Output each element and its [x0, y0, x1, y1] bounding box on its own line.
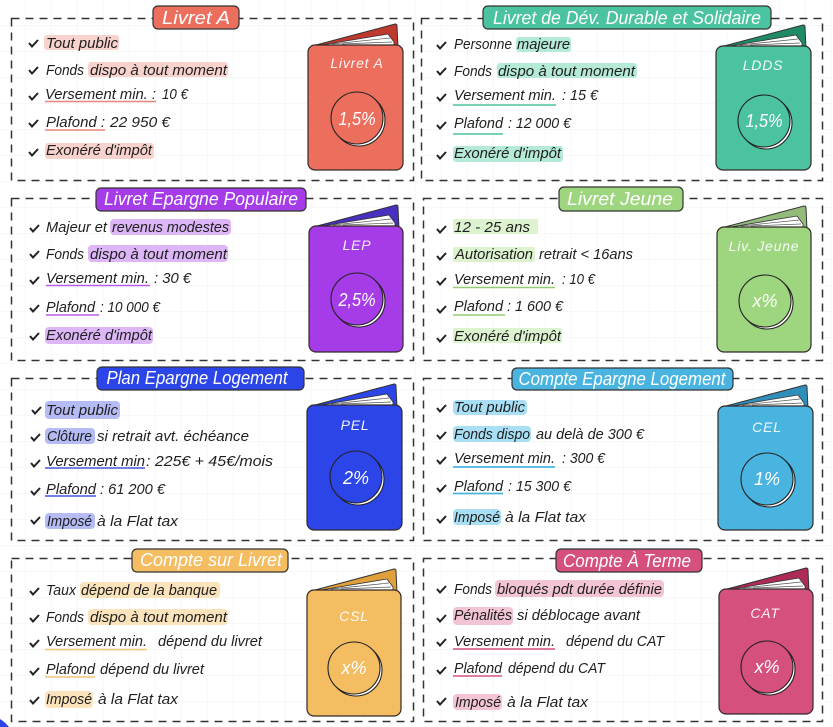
icon: CEL book: 1% [754, 469, 780, 489]
item: Tout public: Tout public [46, 35, 118, 52]
item: Plafond [30, 661, 205, 678]
item: Fonds dispo [30, 245, 228, 263]
item: Versement min: : 15 € [562, 87, 599, 104]
panel: CSL [12, 549, 414, 722]
item: Fonds bloqués: Fonds [454, 581, 492, 598]
icon: livret book: 1,5% [338, 109, 376, 129]
panel: CAT [424, 549, 822, 722]
icon: Liv. Jeune book: x% [751, 291, 778, 311]
item: Autorisation: retrait < 16ans [539, 246, 633, 263]
item: Versement min: : 30 € [154, 270, 192, 287]
item: Autorisation: Autorisation [454, 246, 533, 263]
heading: Livret Jeune [559, 187, 683, 211]
item: Fonds dispo [437, 426, 645, 443]
item: Imposé [30, 691, 179, 708]
item: Plafond [437, 478, 572, 495]
item: Versement min: : 10 € [562, 271, 596, 288]
item: Versement min: Versement min. [454, 633, 555, 650]
item: Taux: dépend de la banque [81, 582, 217, 599]
item: Versement min: : 300 € [562, 450, 606, 467]
item: Fonds dispo: dispo à tout moment [90, 609, 228, 626]
panel: LDDS [422, 6, 822, 180]
icon: CSL book: x% [340, 658, 367, 678]
item: Exonéré: Exonéré d'impôt [46, 142, 153, 159]
icon: livret book: Livret A [330, 55, 384, 71]
panel: CEL [424, 368, 822, 540]
item: Personne majeure [437, 36, 571, 53]
item: Fonds dispo [437, 63, 637, 80]
item: Fonds dispo [29, 62, 228, 79]
item: Versement min: Versement min [46, 453, 145, 470]
heading: Livret A [153, 6, 239, 29]
item: Personne majeure: majeure [517, 36, 570, 53]
item: Imposé: Imposé [454, 509, 500, 526]
heading: Livret A: Livret A [162, 8, 230, 28]
panel: PEL [12, 367, 414, 540]
item: Fonds dispo: Fonds [46, 246, 84, 263]
item: Plafond [30, 299, 161, 316]
item: Versement min: Versement min. [454, 271, 555, 288]
item: Versement min [30, 633, 263, 650]
icon: PEL book: PEL [341, 417, 369, 433]
icon: CEL book: CEL [752, 419, 782, 435]
item: Plafond: Plafond [46, 661, 96, 678]
icon: CAT book [719, 568, 813, 714]
item: Versement min: : 225€ + 45€/mois [146, 453, 274, 470]
heading: LEP: Livret Epargne Populaire [104, 189, 298, 209]
item: Plafond: : 10 000 € [100, 299, 161, 316]
item: Plafond [31, 481, 166, 498]
item: Imposé: Imposé [455, 694, 501, 711]
heading: Livret Jeune: Livret Jeune [567, 189, 673, 209]
icon: livret book [308, 24, 403, 170]
item: Pénalités: si déblocage avant [517, 607, 641, 624]
item: Plafond: dépend du livret [100, 661, 205, 678]
heading: PEL: Plan Epargne Logement [106, 368, 288, 388]
item: Plafond: Plafond [46, 481, 97, 498]
icon: Liv. Jeune book [717, 206, 811, 352]
item: Imposé [437, 509, 587, 526]
panel: Livret A [12, 6, 414, 180]
item: Exonéré: Exonéré d'impôt [454, 145, 562, 162]
icon: LDDS book: LDDS [743, 57, 783, 73]
item: Exonéré: Exonéré d'impôt [46, 327, 153, 344]
item: Plafond: Plafond [46, 299, 96, 316]
item: Fonds dispo [30, 609, 228, 626]
item: Imposé: Imposé [47, 513, 92, 530]
item: Majeur: Majeur et [46, 219, 108, 236]
item: Personne majeure: Personne [454, 36, 512, 53]
item: Imposé [31, 513, 179, 530]
item: Imposé: à la Flat tax [507, 694, 589, 711]
item: Imposé [437, 694, 589, 711]
item: Pénalités [437, 607, 641, 625]
item: Versement min: Versement min. : [45, 86, 156, 103]
item: Clôture [31, 428, 249, 445]
icon: CEL book [718, 385, 813, 530]
item: Plafond [437, 115, 572, 134]
icon: CSL book [307, 569, 401, 716]
item: Plafond: Plafond [454, 660, 503, 677]
icon: LDDS book [716, 25, 811, 170]
item: Imposé: à la Flat tax [97, 513, 179, 530]
item: Fonds dispo: dispo à tout moment [90, 246, 228, 263]
item: Fonds dispo: Fonds dispo [454, 426, 530, 443]
item: Fonds bloqués: bloqués pdt durée définie [497, 581, 662, 598]
item: Versement min [437, 271, 596, 288]
item: Plafond: Plafond : [46, 114, 105, 131]
item: Versement min: Versement min. [46, 633, 147, 650]
item: Versement min: Versement min. [454, 450, 555, 467]
item: Plafond: 22 950 € [109, 114, 171, 131]
item: Plafond: : 1 600 € [507, 298, 564, 315]
item: Plafond [29, 114, 171, 131]
item: Fonds dispo: dispo à tout moment [90, 62, 228, 79]
item: Taux: Taux [46, 582, 76, 599]
item: Plafond: : 12 000 € [508, 115, 572, 132]
heading: CAT: Compte À Terme [563, 551, 691, 571]
item: Pénalités: Pénalités [454, 607, 512, 624]
icon: CAT book: x% [753, 657, 780, 677]
item: Plafond: dépend du CAT [508, 660, 607, 677]
icon: LEP book [309, 205, 403, 352]
heading: LDDS: Livret de Dév. Durable et Solidaire [493, 8, 761, 28]
item: Fonds dispo: dispo à tout moment [498, 63, 636, 80]
item: Plafond [437, 660, 607, 677]
heading: CEL: Compte Epargne Logement [518, 369, 726, 389]
item: Majeur: revenus modestes [112, 219, 229, 236]
icon: PEL book [307, 384, 402, 530]
item: Plafond [437, 298, 564, 315]
item: Imposé: Imposé [46, 691, 92, 708]
item: Plafond: Plafond [454, 115, 504, 132]
panel: LEP [12, 188, 414, 360]
item: Versement min [437, 87, 599, 105]
item: Tout public: Tout public [454, 399, 525, 416]
item: Fonds dispo: Fonds [46, 62, 84, 79]
icon: CSL book: CSL [339, 608, 369, 624]
item: Versement min [30, 270, 192, 287]
item: Fonds dispo: Fonds [46, 609, 84, 626]
item: Clôture: si retrait avt. échéance [97, 428, 249, 445]
item: Plafond: Plafond [454, 478, 504, 495]
item: Versement min: 10 € [162, 86, 189, 103]
item: Clôture: Clôture [47, 428, 92, 445]
item: Exonéré: Exonéré d'impôt [454, 328, 562, 345]
item: Versement min: dépend du CAT [566, 633, 666, 650]
icon: LEP book: 2,5% [338, 290, 376, 310]
icon: LDDS book: 1,5% [746, 111, 782, 131]
heading: CSL: Compte sur Livret [140, 550, 283, 570]
item: Fonds dispo: Fonds [454, 63, 492, 80]
panel: Livret Jeune [424, 187, 822, 360]
item: Versement min: Versement min. [46, 270, 149, 287]
item: Versement min: Versement min. [454, 87, 556, 104]
item: Plafond: : 15 300 € [508, 478, 572, 495]
item: Versement min [437, 450, 606, 467]
item: Plafond: Plafond [454, 298, 504, 315]
item: Fonds bloqués [437, 580, 664, 598]
item: Plafond: : 61 200 € [100, 481, 166, 498]
icon: Liv. Jeune book: Liv. Jeune [729, 238, 799, 254]
item: Versement min [31, 453, 274, 470]
item: Fonds dispo: au delà de 300 € [536, 426, 645, 443]
item: age: 12 - 25 ans [454, 219, 530, 236]
item: Versement min: dépend du livret [158, 633, 263, 650]
item: Tout public: Tout public [46, 402, 118, 419]
item: Imposé: à la Flat tax [505, 509, 587, 526]
icon: CAT book: CAT [750, 605, 780, 621]
item: Majeur [30, 219, 231, 236]
icon: LEP book: LEP [343, 237, 371, 253]
item: Imposé: à la Flat tax [98, 691, 179, 708]
item: Autorisation [437, 246, 633, 263]
icon: PEL book: 2% [342, 468, 369, 488]
item: Versement min [437, 633, 666, 650]
